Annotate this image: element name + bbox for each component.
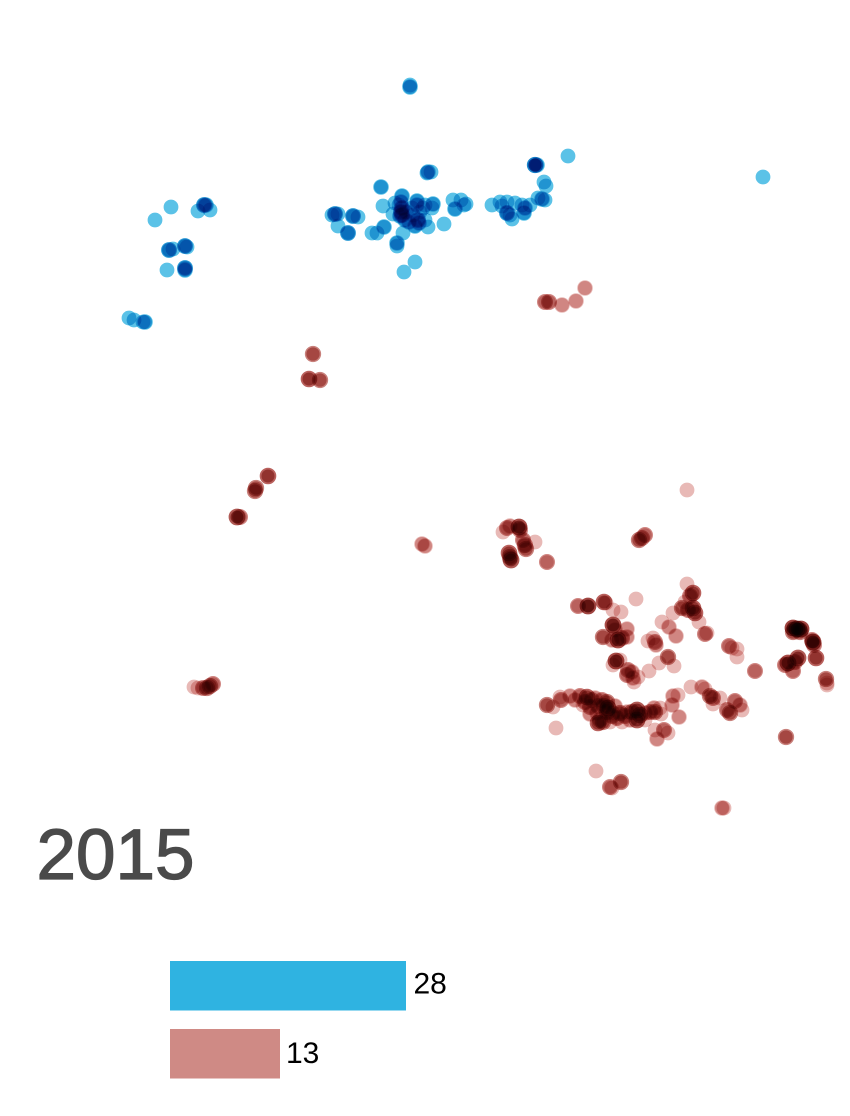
blue bar [170,961,406,1010]
year heading: 2015 [36,816,194,895]
bar chart [170,961,447,1078]
red bar [170,1029,280,1078]
blue dot scatter [122,78,770,329]
red bar value: 13 [286,1037,319,1070]
blue bar value: 28 [414,968,447,1000]
red dot scatter [187,281,834,815]
